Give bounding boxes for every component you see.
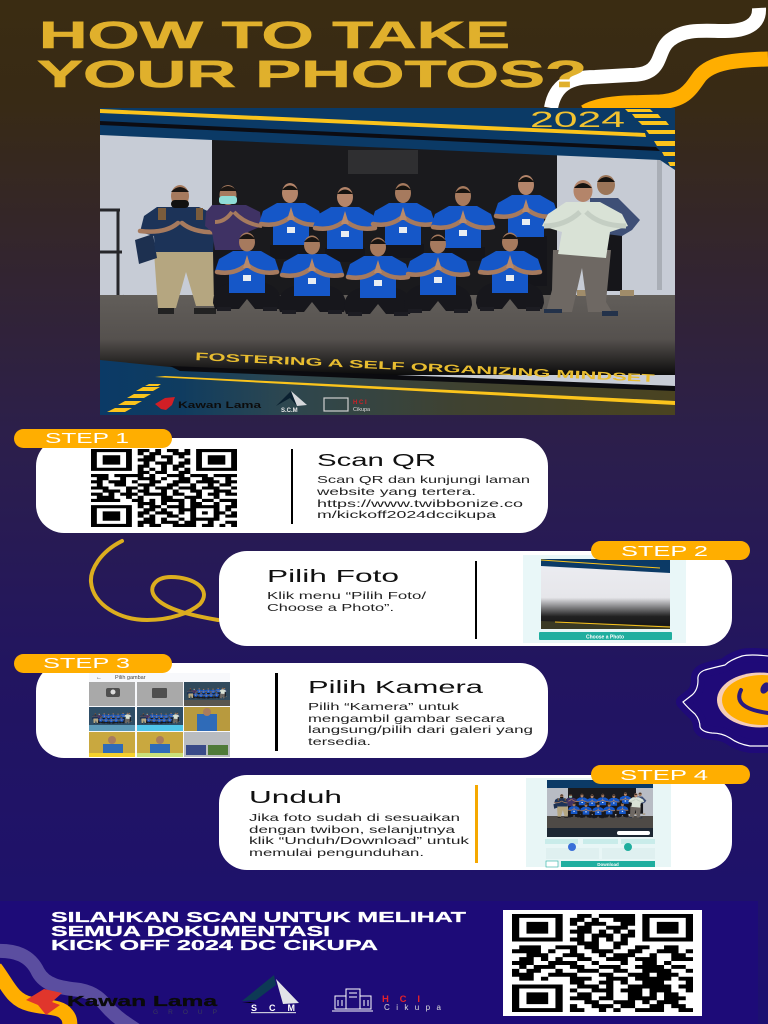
year label: 2024 [530, 107, 625, 132]
screenshot step 4: Download [597, 862, 619, 867]
body step 1: Scan QR dan kunjungi laman [317, 474, 530, 486]
screenshot step 2 [523, 555, 686, 643]
smiley badge [683, 655, 768, 746]
screenshot step 2: Choose a Photo [586, 634, 624, 640]
body step 4: dengan twibon, selanjutnya [249, 824, 455, 836]
body step 1: https://www.twibbonize.co [317, 498, 523, 510]
group photo with frame: Cikupa [353, 407, 371, 413]
group photo with frame [100, 107, 675, 415]
heading step 4: Unduh [249, 787, 342, 807]
logo: HCI Cikupa: HCI [382, 994, 420, 1005]
panel: footer [0, 901, 758, 1024]
body step 2: Choose a Photo”. [267, 602, 394, 614]
QR code step 1 [91, 449, 237, 527]
slogan: FOSTERING A SELF ORGANIZING MINDSET [195, 351, 655, 385]
body step 4: Jika foto sudah di sesuaikan [249, 812, 460, 824]
body step 4: memulai pengunduhan. [249, 847, 424, 859]
body step 1 [315, 474, 530, 521]
step 2 badge [591, 541, 750, 560]
footer text: KICK OFF 2024 DC CIKUPA [51, 937, 378, 954]
logo: HCI Cikupa: Cikupa [384, 1003, 442, 1012]
panel: step 1 scan QR [36, 438, 548, 533]
step 2 badge: STEP 2 [621, 543, 708, 560]
decorative ribbons top right [551, 8, 768, 112]
body step 1: m/kickoff2024dccikupa [317, 509, 496, 521]
rack at left [100, 208, 124, 295]
gallery screenshot step 3: ← [96, 675, 102, 681]
logo: SCM: SCM [251, 1003, 295, 1013]
dark warehouse door [212, 130, 557, 300]
body step 1: website yang tertera. [315, 486, 476, 498]
body step 3: langsung/pilih dari galeri yang [308, 724, 533, 736]
bottom banner [100, 360, 675, 415]
title: YOUR PHOTOS? [37, 54, 587, 96]
screenshot step 4 [526, 778, 671, 867]
step 4 badge [591, 765, 750, 784]
logo: SCM [242, 975, 299, 1013]
swirl decoration [91, 541, 218, 620]
title [37, 15, 587, 96]
step 3 badge: STEP 3 [43, 655, 130, 672]
footer ribbons [0, 951, 136, 1024]
body step 3: Pilih “Kamera” untuk [308, 701, 460, 713]
heading step 1: Scan QR [317, 450, 436, 470]
body step 3: tersedia. [308, 736, 371, 748]
body step 4: klik “Unduh/Download” untuk [249, 835, 470, 847]
body step 3: mengambil gambar secara [308, 713, 505, 725]
body step 2: Klik menu “Pilih Foto/ [267, 590, 426, 602]
heading step 3: Pilih Kamera [308, 677, 483, 697]
logo: Kawan Lama [26, 989, 218, 1016]
QR code footer [503, 910, 702, 1016]
step 4 badge: STEP 4 [620, 767, 708, 784]
yellow hatch top right [625, 109, 675, 166]
footer text: SEMUA DOKUMENTASI [51, 923, 330, 940]
group photo with frame: S.C.M [281, 408, 298, 414]
top banner [100, 108, 675, 170]
panel: step 2 choose photo [219, 551, 732, 646]
body step 2 [267, 590, 426, 614]
step 3 badge [14, 654, 172, 673]
footer text [51, 909, 466, 954]
step 1 badge: STEP 1 [45, 430, 129, 447]
logo: Kawan Lama: Kawan Lama [67, 993, 218, 1010]
step 1 badge [14, 429, 172, 448]
title: HOW TO TAKE [39, 15, 510, 57]
group photo with frame: H C I [353, 400, 367, 406]
group photo with frame: Kawan Lama [178, 400, 262, 411]
heading step 2: Pilih Foto [267, 566, 399, 586]
body step 3 [308, 701, 533, 748]
photo frame logos [155, 397, 175, 410]
body step 4 [249, 812, 470, 859]
yellow hatch bottom left [107, 384, 161, 412]
people [135, 175, 640, 316]
gallery screenshot step 3: Pilih gambar [115, 675, 146, 681]
floor [100, 295, 675, 375]
footer text: SILAHKAN SCAN UNTUK MELIHAT [51, 909, 466, 926]
panel: step 4 download [219, 775, 732, 870]
panel: step 3 choose camera [36, 663, 548, 758]
logo: Kawan Lama: GROUP [153, 1009, 217, 1016]
logo: HCI Cikupa [332, 989, 442, 1012]
gallery screenshot step 3 [89, 673, 230, 757]
